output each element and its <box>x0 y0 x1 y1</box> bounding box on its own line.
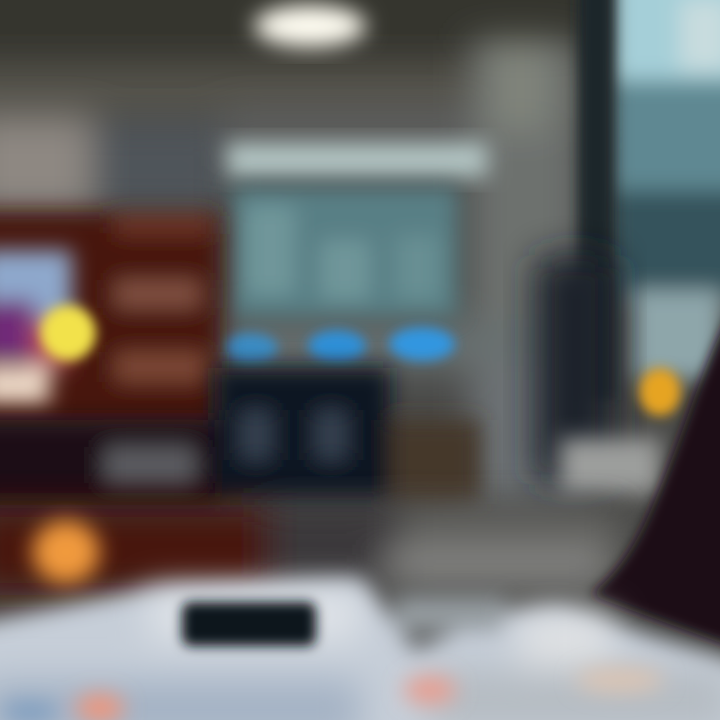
paper tonal variation <box>0 590 720 720</box>
dark furniture band <box>0 368 660 508</box>
colourful poster <box>0 250 72 404</box>
paper colour accents <box>2 668 664 720</box>
blue lights <box>222 327 455 363</box>
table reflection band <box>0 505 620 595</box>
wall screen <box>232 186 458 318</box>
ceiling lamp <box>254 5 366 47</box>
right window <box>612 0 720 380</box>
light banner <box>226 142 488 178</box>
orange reflection <box>32 520 100 584</box>
yellow circle <box>40 305 96 361</box>
orange accent <box>639 368 681 416</box>
back wall <box>0 40 580 500</box>
white papers on table <box>0 578 720 720</box>
dark phone on table <box>182 602 316 646</box>
red shelves <box>0 212 220 427</box>
dark column <box>578 0 614 400</box>
ceiling <box>0 0 610 125</box>
dark foreground shoulder <box>590 300 720 650</box>
silhouette figure <box>535 255 615 485</box>
